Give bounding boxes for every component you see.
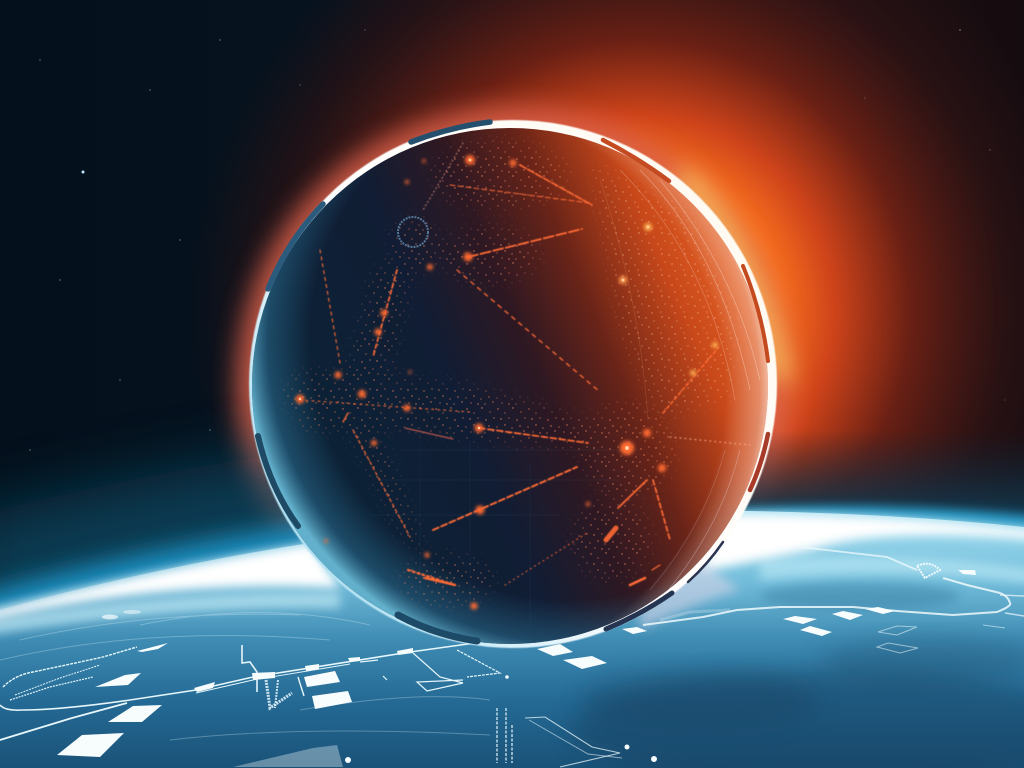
sphere glowing nodes (296, 155, 718, 610)
sphere fine surface arcs (370, 170, 760, 630)
sphere node hot centers (299, 159, 649, 450)
sphere (240, 110, 800, 660)
bracket: bottom left (398, 615, 477, 641)
earth surface (0, 510, 1024, 768)
sphere glowing network lines (300, 143, 750, 585)
horizon highlight: left (0, 544, 340, 622)
bracket: upper left (268, 204, 323, 289)
bracket: lower right (750, 434, 768, 490)
atmosphere glow above the horizon (0, 445, 1024, 640)
bracket: bottom right (606, 593, 672, 629)
sphere ring node (398, 217, 428, 247)
circuit lines on earth: left (0, 643, 512, 763)
bracket: lower left (258, 436, 298, 526)
horizon highlight: right (700, 514, 1024, 572)
bracket: lower right small (688, 542, 723, 582)
white map tiles on earth (57, 570, 976, 767)
bracket: top right (603, 140, 669, 181)
circuit lines on earth: right (525, 547, 1024, 767)
bracket: right (743, 266, 768, 361)
bracket: top left (411, 122, 490, 142)
sphere segmented rim brackets (258, 122, 768, 641)
sphere stippled regions (276, 134, 744, 616)
